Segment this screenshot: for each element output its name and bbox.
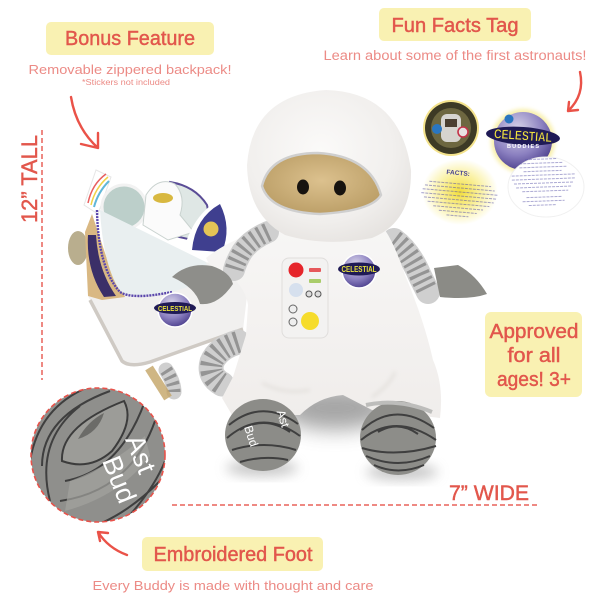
foot: right: [360, 401, 436, 475]
heading: Bonus Feature: Bonus Feature: [65, 28, 195, 50]
silver arm: left: [234, 232, 268, 270]
visor: [262, 153, 381, 214]
arrow: to foot: [98, 532, 127, 555]
backpack stickers: [84, 170, 233, 258]
tag: Celestial Buddies logo: BUDDIES: [507, 144, 539, 150]
dashed height line: [41, 130, 43, 380]
suit body: [206, 228, 441, 418]
heading: Embroidered Foot: Embroidered Foot: [154, 544, 313, 566]
callout: approved for all ages: Approved: [490, 321, 578, 343]
foot: left: Bud: [241, 424, 261, 448]
heading: Fun Facts Tag: [379, 8, 531, 41]
ground shadow: [226, 386, 438, 480]
foot: left: Ast: [274, 408, 293, 430]
hand: left: [172, 265, 233, 304]
callout: approved for all ages: ages! 3+: [497, 369, 571, 391]
text: stickers note: *Stickers not included: [82, 78, 170, 87]
illustration: fun facts tag: [420, 100, 584, 225]
foot embroidery: [96, 430, 162, 507]
lower silver arm: [211, 342, 238, 384]
foot embroidery: Bud: [96, 452, 142, 507]
heading: Embroidered Foot: [142, 537, 323, 571]
chest logo patch: CELESTIAL: [342, 265, 377, 274]
backpack back strap: [68, 231, 88, 265]
backpack straps: [149, 368, 174, 398]
arrow: to tag: [568, 72, 581, 111]
backpack body: [85, 210, 250, 365]
tag: Celestial Buddies logo: CELESTIAL: [494, 126, 553, 145]
heading: Fun Facts Tag: Fun Facts Tag: [392, 15, 518, 37]
callout: approved for all ages: [485, 312, 582, 397]
heading: Bonus Feature: [46, 22, 214, 55]
tag: facts side: [420, 159, 498, 225]
foot embroidery: Ast: [119, 430, 162, 478]
text: 7 inches wide: 7” WIDE: [449, 482, 529, 505]
tag: facts side: FACTS:: [446, 169, 470, 178]
control panel: [282, 258, 328, 338]
chest logo patch: [338, 254, 380, 288]
illustration: plush with backpack: [68, 90, 487, 480]
leg folds: [262, 372, 395, 397]
dashed width line: [172, 504, 537, 506]
panel: fun facts callout: [324, 8, 586, 111]
arrow: to backpack: [71, 97, 98, 148]
text: fun facts description: Learn about some of the first astronauts!: [324, 48, 586, 63]
tag: welcome side: [508, 157, 584, 217]
panel: bonus feature callout: [28, 22, 232, 148]
silver arm: right: [394, 240, 428, 292]
hand: right: [434, 265, 487, 298]
text: 12 inches tall: 12” TALL: [17, 135, 42, 223]
backpack logo patch: [154, 293, 196, 327]
zoomed embroidered foot: [30, 387, 166, 523]
tag: round photo: [423, 100, 479, 156]
foot: left: [225, 399, 301, 471]
backpack logo patch: CELESTIAL: [158, 304, 192, 313]
text: backpack description: Removable zippered backpack!: [28, 62, 232, 77]
text: foot description: Every Buddy is made with thought and care: [92, 578, 374, 593]
helmet: [247, 90, 411, 242]
callout: approved for all ages: for all: [508, 345, 560, 367]
panel: embroidered foot callout: [92, 532, 374, 593]
tag: Celestial Buddies logo: [485, 109, 561, 173]
